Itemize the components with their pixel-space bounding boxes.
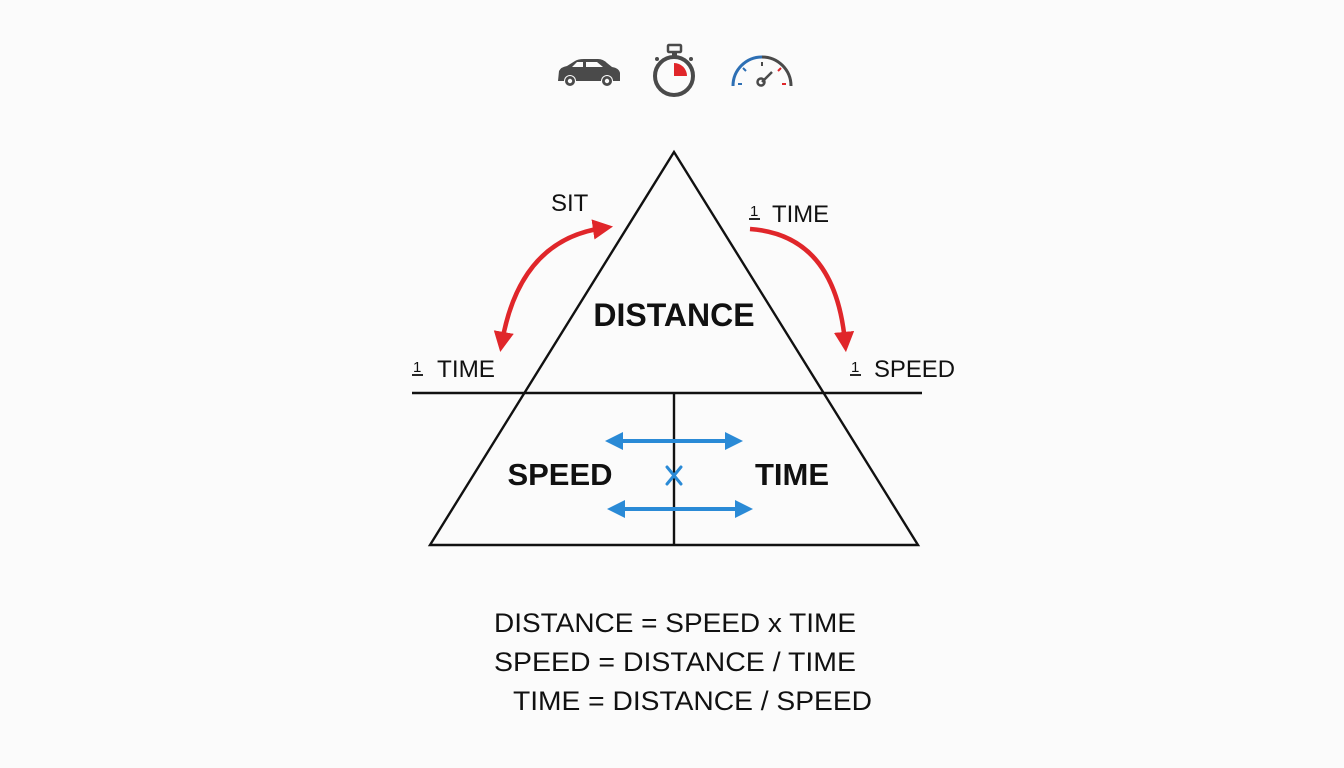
icon: car [558, 59, 620, 87]
label: SPEED: SPEED [507, 457, 613, 492]
multiply sign [667, 467, 681, 484]
side labels: 1 [413, 359, 421, 376]
icon: stopwatch [655, 45, 693, 95]
side labels: TIME [437, 356, 495, 383]
label: TIME: TIME [755, 457, 829, 492]
side labels: 1 [851, 359, 859, 376]
side labels: SIT [551, 190, 589, 217]
formulas: DISTANCE = SPEED x TIME [494, 608, 856, 638]
formulas: SPEED = DISTANCE / TIME [494, 647, 856, 677]
side labels: 1 [750, 203, 758, 220]
label: DISTANCE: DISTANCE [593, 297, 755, 333]
icon: speedometer [733, 57, 791, 86]
side labels: SPEED [874, 356, 955, 383]
side labels [412, 190, 955, 383]
red arrow left [502, 228, 603, 342]
formulas [494, 608, 872, 716]
side labels: TIME [772, 201, 829, 228]
red arrow right [750, 229, 845, 342]
triangle diagram [412, 152, 922, 545]
blue arrows [614, 441, 744, 509]
formulas: TIME = DISTANCE / SPEED [513, 686, 872, 716]
